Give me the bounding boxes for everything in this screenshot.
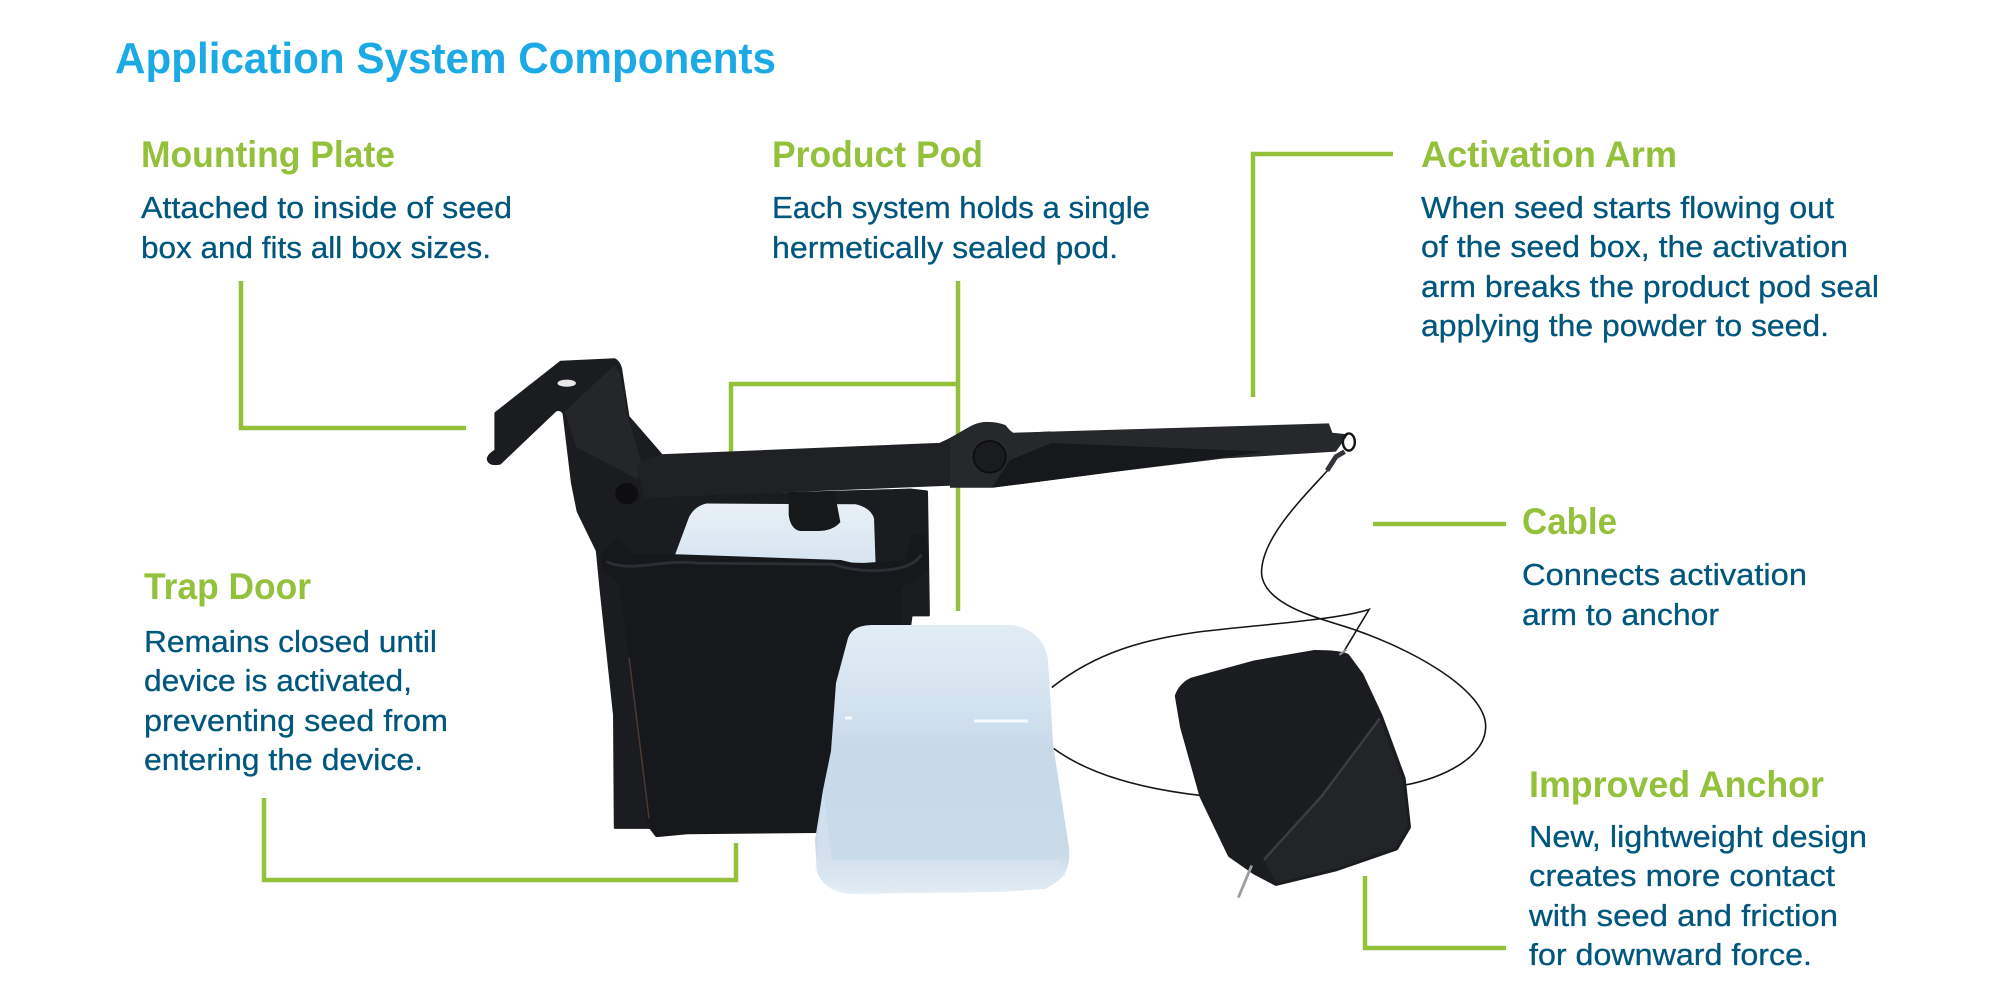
callout: activation arm: applying the powder to seed.	[1421, 308, 1829, 343]
callout: cable: Cable	[1522, 501, 1617, 542]
callout: improved anchor	[1528, 764, 1867, 972]
callout: mounting plate: Mounting Plate	[141, 134, 395, 175]
callout: trap door	[144, 566, 448, 777]
callout: mounting plate: Attached to inside of seed	[141, 190, 512, 225]
callout: improved anchor: with seed and friction	[1528, 898, 1838, 933]
callout: trap door: Trap Door	[144, 566, 311, 607]
cable	[1052, 433, 1486, 796]
callout: activation arm: Activation Arm	[1421, 134, 1677, 175]
callout: improved anchor: Improved Anchor	[1529, 764, 1824, 805]
leader line: cable	[1373, 522, 1506, 526]
callout: cable	[1522, 501, 1807, 632]
callout: trap door: Remains closed until	[144, 624, 437, 659]
callout: activation arm	[1421, 134, 1879, 343]
callout: improved anchor: for downward force.	[1529, 937, 1812, 972]
callout: product pod: Each system holds a single	[772, 190, 1150, 225]
callout: improved anchor: creates more contact	[1529, 858, 1835, 893]
leader line: trap door	[264, 798, 736, 880]
callout: product pod: Product Pod	[772, 134, 983, 175]
leader line: improved anchor	[1365, 876, 1506, 948]
callout: trap door: preventing seed from	[144, 703, 448, 738]
callout: activation arm: of the seed box, the activation	[1421, 229, 1848, 264]
callout: cable: Connects activation	[1522, 557, 1807, 592]
callout: mounting plate: box and fits all box sizes.	[141, 230, 491, 265]
callout: activation arm: When seed starts flowing out	[1421, 190, 1834, 225]
leader line: activation arm	[1253, 154, 1393, 397]
product photo: application device	[488, 360, 1486, 898]
outer product pod	[815, 625, 1069, 894]
improved anchor	[1178, 650, 1408, 898]
leader line: product pod	[731, 281, 958, 611]
activation arm	[638, 423, 1050, 497]
callout: product pod: hermetically sealed pod.	[772, 230, 1118, 265]
callout: improved anchor: New, lightweight design	[1529, 819, 1867, 854]
inner product pod	[674, 492, 876, 563]
callout: product pod	[772, 134, 1150, 265]
callout: activation arm: arm breaks the product pod seal	[1421, 269, 1879, 304]
callout: mounting plate	[141, 134, 512, 265]
callout: cable: arm to anchor	[1522, 597, 1719, 632]
trap door bucket	[603, 535, 927, 836]
mounting plate	[488, 360, 928, 831]
leader line: mounting plate	[241, 281, 466, 428]
callout: trap door: entering the device.	[144, 742, 423, 777]
title: Application System Components	[115, 34, 776, 83]
callout: trap door: device is activated,	[144, 663, 412, 698]
